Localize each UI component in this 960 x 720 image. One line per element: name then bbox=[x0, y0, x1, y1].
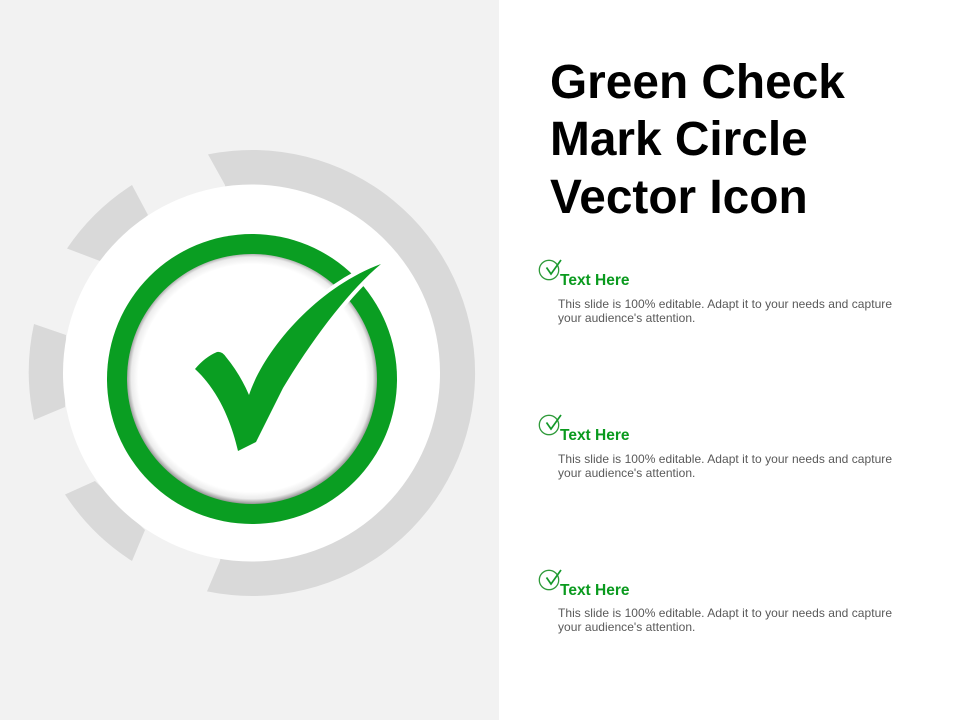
item text bbox=[558, 452, 892, 480]
icon: check circle bbox=[538, 570, 562, 590]
list item 2 bbox=[538, 414, 892, 480]
item heading: Text Here bbox=[560, 427, 630, 444]
left grey panel bbox=[0, 0, 499, 720]
segmented outer ring bbox=[29, 150, 475, 596]
item text bbox=[558, 606, 892, 634]
title: Mark Circle bbox=[550, 113, 808, 166]
item text: This slide is 100% editable. Adapt it to your needs and capture bbox=[558, 606, 892, 620]
item heading: Text Here bbox=[560, 582, 630, 599]
badge graphic: segmented ring with green check bbox=[28, 150, 475, 596]
list item 3 bbox=[538, 570, 892, 634]
icon: check circle bbox=[538, 414, 562, 436]
item text: your audience's attention. bbox=[558, 466, 695, 480]
title bbox=[550, 56, 845, 224]
item text: your audience's attention. bbox=[558, 311, 695, 325]
item heading: Text Here bbox=[560, 272, 630, 289]
title: Vector Icon bbox=[550, 170, 808, 224]
title: Green Check bbox=[550, 56, 845, 108]
green ring bbox=[107, 234, 397, 524]
item text: This slide is 100% editable. Adapt it to your needs and capture bbox=[558, 452, 892, 466]
list item 1 bbox=[538, 260, 892, 325]
check mark bbox=[195, 264, 381, 451]
item text: This slide is 100% editable. Adapt it to your needs and capture bbox=[558, 297, 892, 311]
item text bbox=[558, 297, 892, 325]
icon: check circle bbox=[538, 260, 562, 280]
item text: your audience's attention. bbox=[558, 620, 695, 634]
white disc bbox=[63, 184, 440, 562]
